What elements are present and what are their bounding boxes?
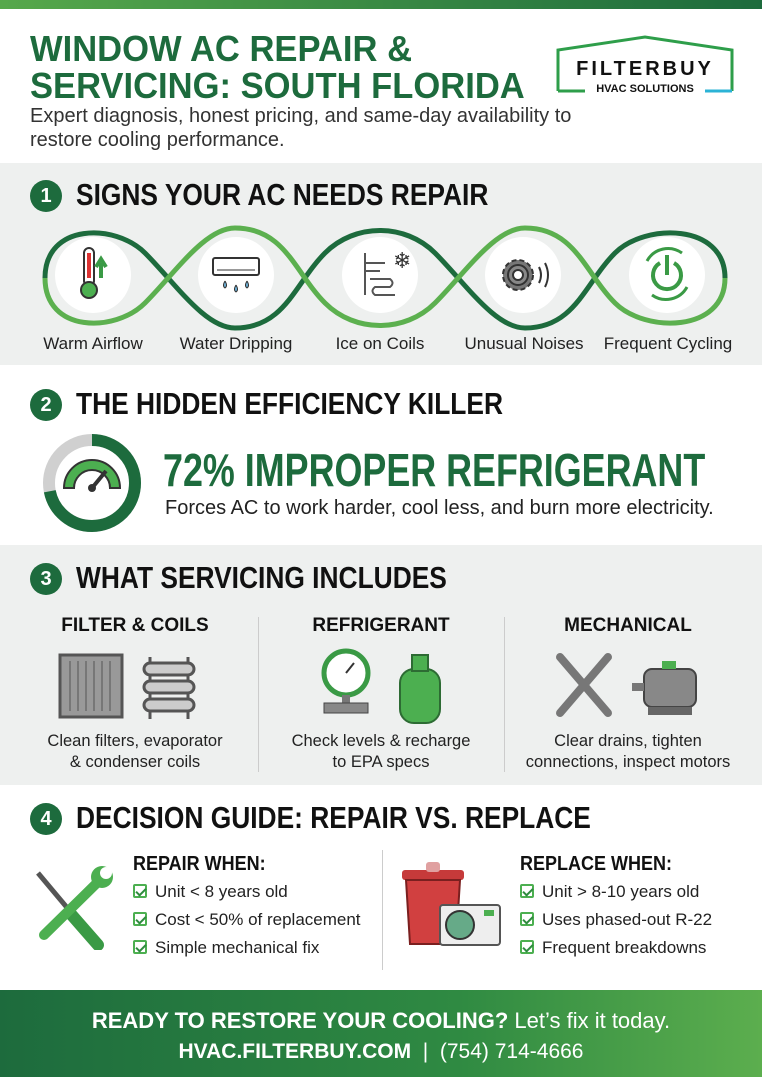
column: filter & coils: & condenser coils (70, 753, 200, 771)
repair list: Cost < 50% of replacement (155, 910, 361, 929)
donut gauge (43, 434, 141, 532)
replace list: Uses phased-out R-22 (542, 910, 712, 929)
column: filter & coils: FILTER & COILS (61, 615, 209, 636)
wave chain icons (42, 226, 728, 330)
icon: ice coils (365, 249, 411, 295)
panel: efficiency killer (30, 386, 714, 532)
footer CTA (0, 990, 762, 1077)
column: refrigerant (292, 615, 470, 771)
logo (556, 36, 734, 95)
stat description: Forces AC to work harder, cool less, and burn more electricity. (165, 497, 714, 519)
repair list: REPAIR WHEN: (133, 853, 266, 875)
icon: ice coils: ❄ (393, 249, 411, 274)
labels: Warm Airflow (43, 334, 143, 353)
footer CTA: READY TO RESTORE YOUR COOLING? Let’s fix it today. (92, 1008, 670, 1033)
heading 3: WHAT SERVICING INCLUDES (76, 560, 447, 595)
panel: signs (0, 163, 762, 365)
badge 1 (30, 180, 62, 212)
title: WINDOW AC REPAIR & (30, 28, 412, 69)
heading 4: DECISION GUIDE: REPAIR VS. REPLACE (76, 800, 591, 835)
stat: 72% IMPROPER REFRIGERANT (163, 444, 705, 496)
badge 2: 2 (40, 394, 52, 416)
panel: signs: Frequent Cycling (604, 334, 732, 353)
replace list: Unit > 8-10 years old (542, 882, 699, 901)
repair list (133, 853, 361, 957)
column: filter & coils: Clean filters, evaporator (47, 732, 223, 750)
repair list: Unit < 8 years old (155, 882, 288, 901)
column: mechanical: Clear drains, tighten (554, 732, 702, 750)
column: refrigerant: Check levels & recharge (292, 732, 470, 750)
panel: signs: Unusual Noises (464, 334, 584, 353)
icon: bin and unit (402, 862, 501, 946)
heading 2: THE HIDDEN EFFICIENCY KILLER (76, 386, 503, 421)
panel: decision guide (30, 800, 712, 970)
replace list (520, 853, 712, 957)
replace list: Frequent breakdowns (542, 938, 706, 957)
top bar (0, 0, 762, 9)
column: mechanical (526, 615, 730, 771)
column: refrigerant: REFRIGERANT (312, 615, 450, 636)
logo: HVAC SOLUTIONS (596, 83, 694, 95)
column: mechanical: MECHANICAL (564, 615, 692, 636)
subtitle: Expert diagnosis, honest pricing, and same-day availability to restore cooling performance. (30, 105, 571, 151)
panel: signs: Ice on Coils (336, 334, 424, 353)
icon: ac dripping (213, 258, 259, 292)
panel: signs: Water Dripping (180, 334, 292, 353)
column: mechanical: connections, inspect motors (526, 753, 730, 771)
title (30, 28, 525, 106)
badge 1: 1 (40, 185, 52, 207)
badge 3: 3 (40, 568, 52, 590)
panel: servicing (0, 545, 762, 785)
repair list: Simple mechanical fix (155, 938, 319, 957)
title: SERVICING: SOUTH FLORIDA (30, 65, 525, 106)
icon: gear (503, 260, 548, 290)
icon: thermometer (81, 248, 106, 298)
badge 2 (30, 389, 62, 421)
heading 1: SIGNS YOUR AC NEEDS REPAIR (76, 177, 488, 212)
icon: tools (36, 866, 113, 950)
replace list: REPLACE WHEN: (520, 853, 672, 875)
badge 3 (30, 563, 62, 595)
column: filter & coils (47, 615, 223, 771)
footer CTA: HVAC.FILTERBUY.COM | (754) 714-4666 (179, 1040, 583, 1063)
logo: FILTERBUY (576, 58, 714, 80)
column: refrigerant: to EPA specs (333, 753, 429, 771)
icon: power cycle (647, 249, 687, 299)
badge 4: 4 (40, 808, 52, 830)
badge 4 (30, 803, 62, 835)
